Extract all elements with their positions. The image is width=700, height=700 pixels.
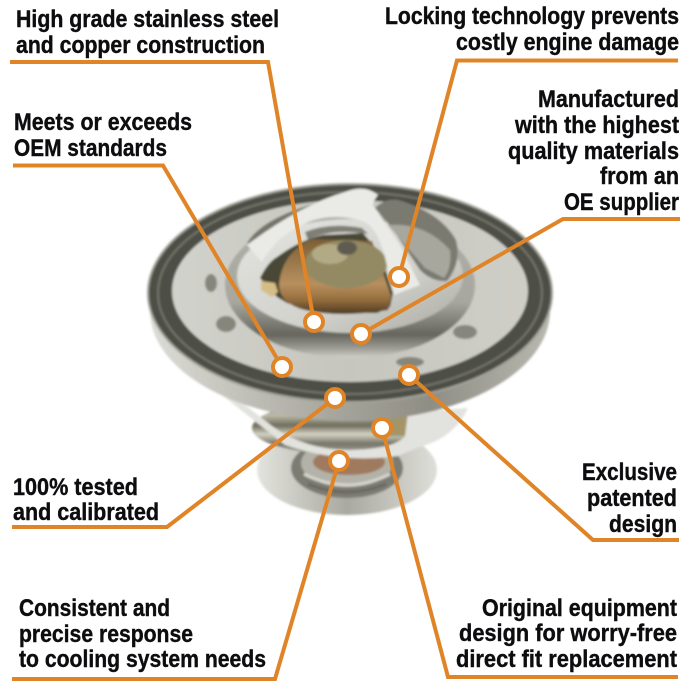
text: Manufactured: with the highest	[514, 112, 679, 139]
marker	[330, 452, 348, 470]
marker	[326, 389, 344, 407]
callout: 100% tested	[12, 389, 344, 527]
text: Locking: costly engine damage	[456, 29, 679, 56]
leader line	[12, 398, 335, 527]
plate rivets	[205, 274, 477, 367]
dome highlight	[312, 244, 348, 264]
left opening	[247, 202, 330, 245]
dome top	[237, 219, 463, 333]
text: Manufactured: Manufactured	[538, 86, 679, 113]
text: Meets: OEM standards	[14, 135, 167, 162]
upper bridge	[247, 189, 420, 295]
right opening inner band	[388, 225, 450, 278]
gasket highlight	[158, 192, 542, 394]
marker	[390, 268, 408, 286]
text: Consistent: precise response	[19, 621, 193, 648]
callout: Original equipment	[373, 419, 678, 677]
marker	[352, 325, 370, 343]
text: Exclusive	[582, 459, 677, 538]
text: High grade	[16, 6, 279, 59]
text: Consistent: Consistent and	[19, 595, 170, 622]
leader line	[361, 219, 680, 334]
lower bridge frame	[222, 395, 468, 458]
text: Exclusive: patented	[587, 485, 677, 512]
text: Exclusive: design	[609, 511, 677, 538]
thermostat photo	[148, 184, 552, 515]
small tab	[261, 281, 278, 297]
callout: High grade stainless steel	[10, 6, 323, 331]
text: 100%	[13, 474, 159, 526]
leader line	[399, 60, 678, 277]
leader line	[10, 62, 314, 322]
text: Original: direct fit replacement	[456, 646, 677, 673]
bridge shadow	[305, 226, 368, 240]
text: Meets: Meets or exceeds	[14, 109, 192, 136]
central opening	[260, 233, 393, 313]
text: Manufactured: OE supplier	[564, 189, 679, 216]
callout: Meets or exceeds	[13, 109, 291, 376]
text: Original: Original equipment	[482, 595, 677, 622]
brass bulb	[279, 239, 391, 314]
gasket skirt	[150, 201, 550, 421]
lower cup	[257, 425, 437, 515]
text: Locking	[385, 3, 679, 56]
marker	[400, 366, 418, 384]
marker	[273, 358, 291, 376]
text: Manufactured: from an	[600, 163, 679, 190]
text: Meets	[14, 109, 192, 162]
leader line	[382, 428, 678, 677]
text: 100%: 100% tested	[13, 474, 138, 501]
dome rim	[225, 212, 475, 358]
callout: Exclusive patented	[400, 366, 679, 540]
leader line	[409, 375, 679, 540]
ring behind right opening	[375, 200, 458, 281]
text: Original: design for worry-free	[459, 620, 677, 647]
text: Manufactured	[508, 86, 679, 216]
callout: Consistent	[12, 452, 348, 679]
callout: Locking technology	[385, 3, 679, 286]
centre pin	[337, 241, 357, 255]
text: Exclusive: Exclusive	[582, 459, 677, 486]
callout: Manufactured	[352, 86, 680, 343]
coil spring	[252, 402, 428, 454]
leader line	[12, 461, 339, 679]
text: Manufactured: quality materials	[508, 138, 679, 165]
marker	[373, 419, 391, 437]
text: High grade: High grade stainless steel	[16, 6, 279, 33]
steel plate	[172, 200, 528, 382]
olive dome	[305, 240, 387, 288]
text: Original	[456, 595, 677, 673]
text: Consistent: to cooling system needs	[19, 646, 266, 673]
text: Consistent	[19, 595, 266, 673]
marker	[305, 313, 323, 331]
text: 100%: and calibrated	[13, 499, 159, 526]
text: High grade: and copper construction	[16, 32, 265, 59]
leader line	[13, 166, 282, 367]
rubber gasket	[148, 184, 552, 402]
